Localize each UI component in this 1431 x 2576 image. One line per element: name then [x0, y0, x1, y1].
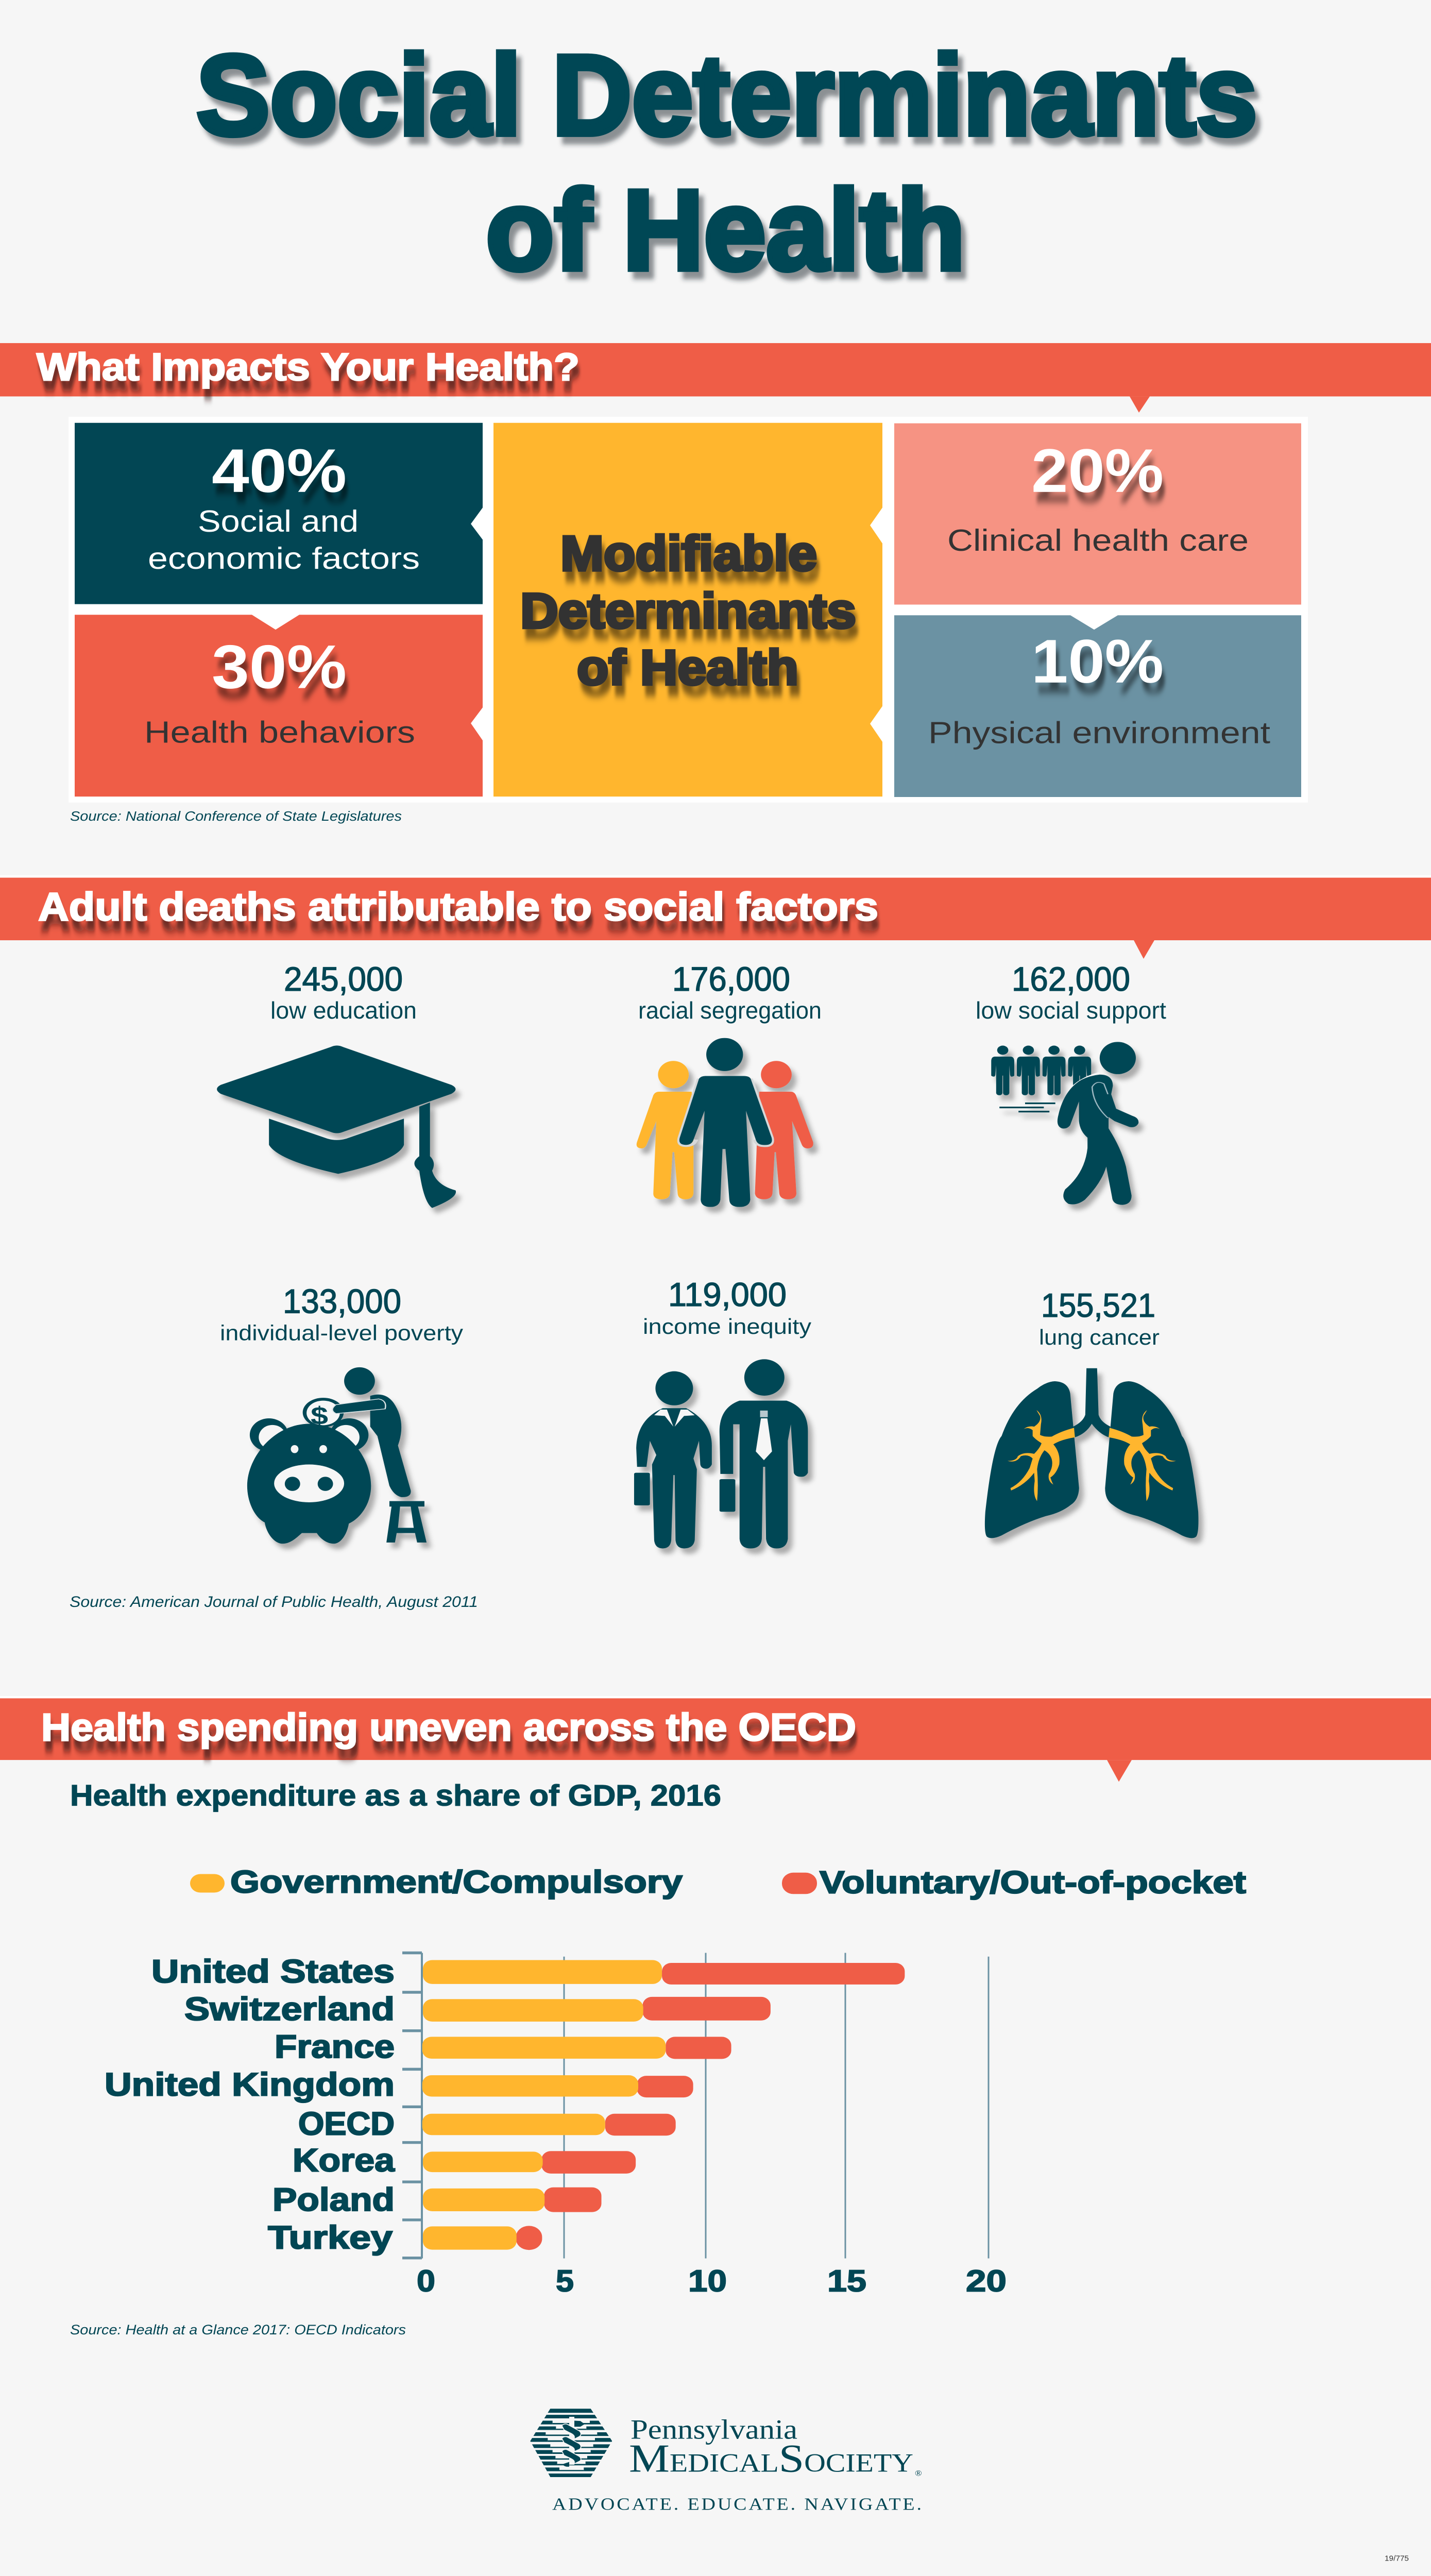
stat: racial segregation: 176,000 — [672, 960, 790, 998]
country labels: United States — [151, 1954, 395, 1990]
source note: NCSL: Source: National Conference of State Legislatures — [70, 808, 402, 824]
chart bars — [422, 1960, 905, 2250]
axis numbers: 10 — [688, 2264, 727, 2298]
stat: low social support: 162,000 — [1012, 960, 1130, 998]
panel: modifiable determinants grid — [69, 417, 1308, 803]
box: modifiable determinants of health: of Health — [577, 640, 798, 695]
logo wordmark: ADVOCATE. EDUCATE. NAVIGATE. — [552, 2494, 922, 2514]
box: modifiable determinants of health — [493, 423, 882, 796]
box: physical environment 10% — [894, 615, 1301, 797]
icon: piggy bank with person and stool — [247, 1367, 427, 1544]
source note: AJPH: Source: American Journal of Public Health, August 2011 — [70, 1594, 478, 1611]
stat: income inequity — [634, 1276, 811, 1548]
icon: person walking away from group — [991, 1042, 1138, 1205]
stat: income inequity: income inequity — [643, 1315, 811, 1339]
icon: lungs — [985, 1368, 1199, 1538]
country labels: Switzerland — [184, 1991, 395, 2027]
icon: three people — [637, 1038, 813, 1207]
country labels: Korea — [293, 2143, 395, 2179]
box: health behaviors 30%: 30% — [212, 632, 347, 701]
section banner: adult deaths — [0, 875, 1431, 959]
country labels: OECD — [298, 2106, 395, 2142]
page number: 19/775 — [1385, 2554, 1409, 2563]
logo wordmark: MEDICALSOCIETY — [629, 2436, 913, 2481]
icon: piggy bank with person and stool: $ — [311, 1402, 328, 1430]
logo mark: striped hexagon with staff — [529, 2409, 615, 2477]
title — [196, 31, 1257, 294]
icon: business woman and man — [634, 1359, 808, 1548]
stat: individual-level poverty — [220, 1282, 463, 1544]
country labels: Turkey — [268, 2220, 393, 2256]
stat: income inequity: 119,000 — [668, 1276, 787, 1313]
stat: individual-level poverty: individual-level poverty — [220, 1321, 463, 1345]
axis numbers: 20 — [966, 2264, 1007, 2298]
axis numbers — [417, 2264, 1007, 2298]
box: physical environment 10%: Physical environment — [928, 716, 1270, 750]
stat: lung cancer: lung cancer — [1039, 1326, 1160, 1349]
box: social and economic factors 40%: Social and — [198, 504, 359, 538]
stat: racial segregation — [637, 960, 822, 1207]
stat: racial segregation: racial segregation — [638, 997, 822, 1024]
box: modifiable determinants of health: Determinants — [520, 584, 856, 638]
logo wordmark — [552, 2414, 922, 2514]
country labels — [105, 1954, 395, 2256]
section banner: what impacts your health — [0, 343, 1431, 413]
section banner: health spending: Health spending uneven across the OECD — [41, 1705, 856, 1749]
axis numbers: 15 — [827, 2264, 866, 2298]
title: Social Determinants — [196, 31, 1257, 159]
axis numbers: 5 — [556, 2264, 574, 2298]
chart axes and gridlines — [402, 1953, 989, 2259]
stat: low social support — [976, 960, 1166, 1205]
stat: lung cancer — [985, 1286, 1199, 1538]
title: of Health — [486, 166, 965, 294]
logo wordmark: Pennsylvania — [631, 2414, 797, 2445]
box: social and economic factors 40%: economic factors — [148, 541, 420, 575]
section banner: adult deaths: Adult deaths attributable to social factors — [38, 885, 878, 929]
box: modifiable determinants of health: Modifiable — [560, 527, 817, 581]
box: health behaviors 30% — [75, 615, 483, 796]
chart legend: Voluntary/Out-of-pocket — [820, 1865, 1246, 1900]
stat: low education: 245,000 — [284, 960, 403, 998]
box: clinical health care 20%: 20% — [1031, 436, 1164, 505]
box: clinical health care 20% — [894, 423, 1301, 605]
chart subheading: Health expenditure as a share of GDP, 2016 — [70, 1778, 721, 1812]
box: social and economic factors 40% — [75, 423, 483, 604]
country labels: United Kingdom — [105, 2067, 395, 2103]
axis numbers: 0 — [417, 2264, 435, 2298]
country labels: France — [275, 2029, 395, 2065]
logo: Pennsylvania Medical Society — [529, 2409, 922, 2514]
section banner: health spending — [0, 1696, 1431, 1782]
source note: OECD: Source: Health at a Glance 2017: OECD Indicators — [70, 2322, 406, 2338]
stat: individual-level poverty: 133,000 — [283, 1282, 401, 1320]
country labels: Poland — [272, 2182, 395, 2218]
section banner: what impacts your health: What Impacts Your Health? — [37, 345, 580, 388]
logo wordmark: ® — [915, 2468, 922, 2478]
box: health behaviors 30%: Health behaviors — [144, 716, 415, 750]
box: social and economic factors 40%: 40% — [212, 436, 347, 505]
stat: low social support: low social support — [976, 997, 1166, 1024]
stat: low education: low education — [270, 997, 417, 1024]
stat: lung cancer: 155,521 — [1041, 1286, 1155, 1324]
box: clinical health care 20%: Clinical health care — [947, 523, 1249, 557]
chart legend: Government/Compulsory — [230, 1864, 683, 1900]
icon: graduation cap — [217, 1045, 456, 1208]
box: physical environment 10%: 10% — [1031, 626, 1164, 696]
bar chart: health spending by country — [105, 1953, 1007, 2298]
stat: low education — [217, 960, 456, 1208]
chart legend — [190, 1864, 1246, 1900]
